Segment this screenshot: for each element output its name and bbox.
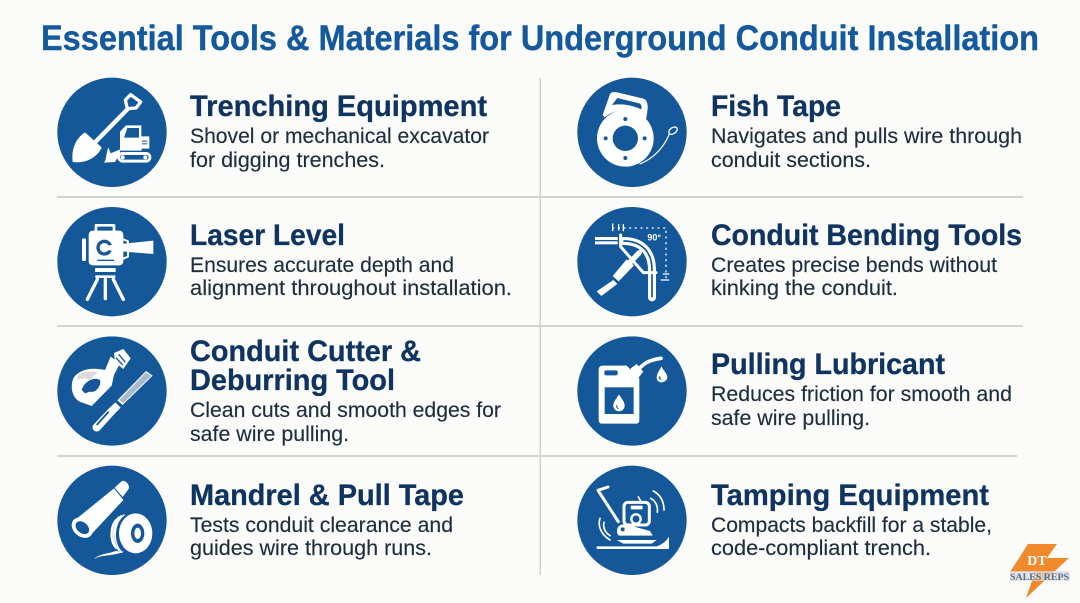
- panel: conduit cutter and deburring tool: safe wire pulling.: [190, 422, 349, 446]
- logo: DT Sales Reps: SALES REPS: [1010, 573, 1069, 583]
- heading: Fish Tape: [711, 90, 841, 123]
- description: Tests conduit clearance and: [190, 513, 453, 537]
- panel: conduit cutter and deburring tool: Deburring Tool: [190, 364, 395, 397]
- panel: tamping equipment: [577, 466, 992, 575]
- icon: conduit bender with 90 degree scale: [577, 207, 687, 316]
- panel: pulling lubricant: safe wire pulling.: [711, 406, 870, 430]
- panel: laser level: alignment throughout installation.: [190, 276, 512, 300]
- heading: Conduit Bending Tools: [711, 219, 1022, 252]
- panel: laser level: [57, 207, 512, 316]
- description: Reduces friction for smooth and: [711, 382, 1012, 406]
- panel: conduit bending tools: kinking the conduit.: [711, 276, 898, 300]
- heading: Conduit Cutter &: [190, 335, 421, 368]
- logo: DT Sales Reps: [1010, 544, 1070, 598]
- description: Shovel or mechanical excavator: [190, 124, 489, 148]
- icon: lubricant jug and drops: [577, 336, 687, 446]
- panel: conduit cutter and deburring tool: [57, 335, 501, 446]
- panel: fish tape: conduit sections.: [711, 148, 871, 172]
- icon: mandrel and tape roll: [57, 466, 167, 575]
- description: Ensures accurate depth and: [190, 253, 454, 277]
- description: Creates precise bends without: [711, 253, 997, 277]
- icon: plate compactor: [577, 466, 687, 575]
- description: Navigates and pulls wire through: [711, 124, 1022, 148]
- icon: laser level on tripod: [57, 207, 167, 316]
- heading: Tamping Equipment: [711, 479, 989, 512]
- panel: conduit bending tools: [577, 207, 1022, 316]
- heading: Laser Level: [190, 219, 345, 252]
- heading: Mandrel & Pull Tape: [190, 479, 464, 512]
- logo: DT Sales Reps: DT: [1027, 554, 1047, 569]
- icon: shovel and excavator: [57, 78, 167, 187]
- icon: conduit bender with 90 degree scale: 90°: [647, 233, 661, 243]
- panel: mandrel and pull tape: [57, 466, 464, 575]
- description: Clean cuts and smooth edges for: [190, 398, 501, 422]
- heading: Pulling Lubricant: [711, 348, 945, 381]
- icon: fish tape reel: [577, 78, 687, 187]
- heading: Trenching Equipment: [190, 90, 487, 123]
- panel: fish tape: [577, 78, 1022, 187]
- description: Compacts backfill for a stable,: [711, 513, 992, 537]
- panel: pulling lubricant: [577, 336, 1012, 446]
- icon: cutter and file: [57, 336, 167, 446]
- panel: tamping equipment: code-compliant trench.: [711, 536, 931, 560]
- panel: trenching equipment: [57, 78, 489, 187]
- panel: trenching equipment: for digging trenches.: [190, 148, 385, 172]
- panel: mandrel and pull tape: guides wire through runs.: [190, 536, 432, 560]
